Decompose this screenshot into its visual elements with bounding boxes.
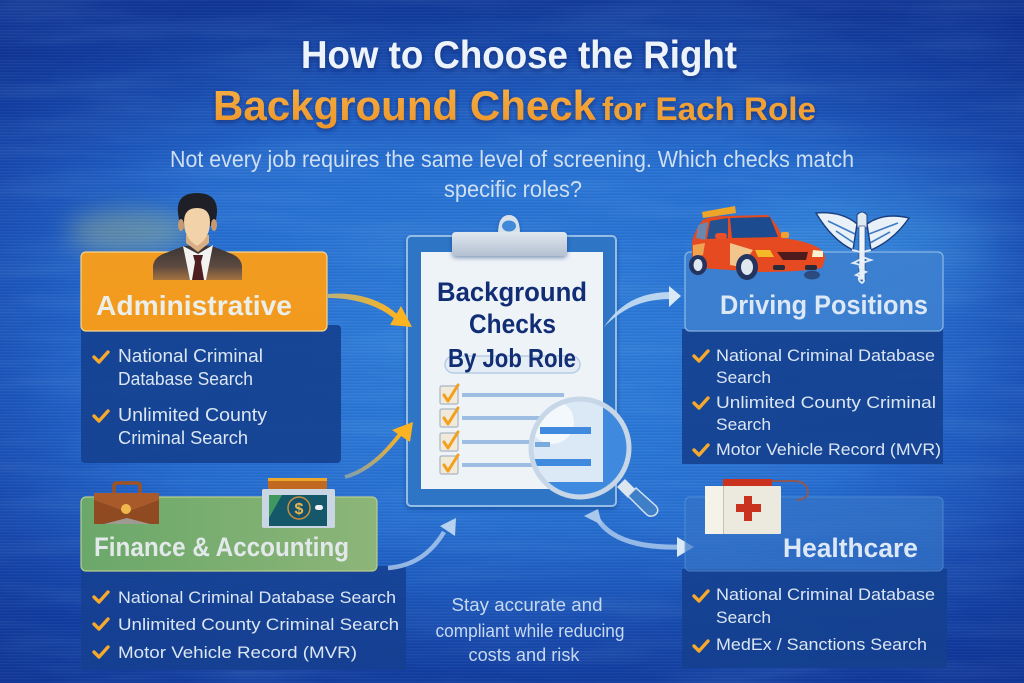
check list: Finance xyxy=(94,588,399,662)
check list: Administrative: Criminal Search xyxy=(118,428,248,448)
subtitle xyxy=(170,146,854,202)
callout: stay accurate: costs and risk xyxy=(468,645,581,665)
clipboard heading xyxy=(437,277,587,373)
subtitle: specific roles? xyxy=(444,176,582,202)
callout: stay accurate xyxy=(436,595,624,665)
check list: Driving Positions: Search xyxy=(716,368,771,387)
check list: Driving Positions xyxy=(694,346,941,459)
check list: Healthcare: National Criminal Database xyxy=(716,585,935,604)
arrow: Finance to clipboard xyxy=(345,422,413,477)
check list: Finance: Unlimited County Criminal Search xyxy=(118,615,399,634)
check list: Finance: Motor Vehicle Record (MVR) xyxy=(118,643,357,662)
check list: Driving Positions: Motor Vehicle Record (MVR) xyxy=(716,440,941,459)
icon: wallet with dollar xyxy=(262,478,335,528)
icon: first aid kit xyxy=(705,479,808,534)
panel: Finance checks xyxy=(81,566,406,670)
subtitle: Not every job requires the same level of screening. Which checks match xyxy=(170,146,854,172)
icon: magnifying glass xyxy=(525,395,658,516)
arrow: clipboard to Driving Positions xyxy=(604,286,681,327)
heading box: Administrative xyxy=(81,252,327,331)
check list: Healthcare: Search xyxy=(716,608,771,627)
icon: orange car xyxy=(689,206,825,280)
check list: Administrative: Unlimited County xyxy=(118,405,267,425)
clipboard board xyxy=(407,236,616,506)
clipboard heading: Background xyxy=(437,277,587,307)
check list: Administrative: Database Search xyxy=(118,369,253,389)
clipboard heading: Checks xyxy=(469,309,556,339)
check list: Finance: National Criminal Database Search xyxy=(118,588,396,607)
icon: caduceus xyxy=(816,212,909,283)
heading box: Finance & Accounting xyxy=(81,497,377,571)
title: for Each Role xyxy=(602,91,816,127)
clipboard heading: By Job Role xyxy=(448,343,576,373)
panel: Administrative checks xyxy=(81,325,341,463)
check list: Driving Positions: Search xyxy=(716,415,771,434)
icon: businessman xyxy=(153,193,242,280)
clip xyxy=(452,215,567,256)
callout: stay accurate: compliant while reducing xyxy=(436,621,624,641)
panel: Healthcare checks xyxy=(682,569,947,668)
arrow: clipboard to Healthcare xyxy=(584,509,694,557)
heading box: Finance & Accounting: Finance & Accounting xyxy=(94,532,349,562)
checklist xyxy=(440,385,564,474)
heading box: Driving Positions xyxy=(685,252,943,331)
heading box: Healthcare: Healthcare xyxy=(783,533,918,563)
check list: Healthcare xyxy=(694,585,935,654)
arrow: Administrative to clipboard xyxy=(327,294,412,327)
heading box: Healthcare xyxy=(685,497,943,571)
arrow: Finance to clipboard centre xyxy=(388,518,456,568)
check list: Administrative xyxy=(94,346,267,448)
title xyxy=(213,34,816,129)
title: Background Check xyxy=(213,82,597,129)
check list: Administrative: National Criminal xyxy=(118,346,263,366)
heading box: Administrative: Administrative xyxy=(96,290,292,321)
icon: wallet with dollar: $ xyxy=(295,501,304,518)
icon: briefcase xyxy=(94,483,159,524)
panel: Driving Positions checks xyxy=(682,329,943,464)
clipboard xyxy=(407,215,658,516)
title: How to Choose the Right xyxy=(301,34,737,77)
check list: Driving Positions: Unlimited County Criminal xyxy=(716,393,936,412)
heading box: Driving Positions: Driving Positions xyxy=(720,290,928,320)
check list: Driving Positions: National Criminal Database xyxy=(716,346,935,365)
paper sheet xyxy=(421,252,603,489)
callout: stay accurate: Stay accurate and xyxy=(452,595,602,615)
check list: Healthcare: MedEx / Sanctions Search xyxy=(716,635,927,654)
